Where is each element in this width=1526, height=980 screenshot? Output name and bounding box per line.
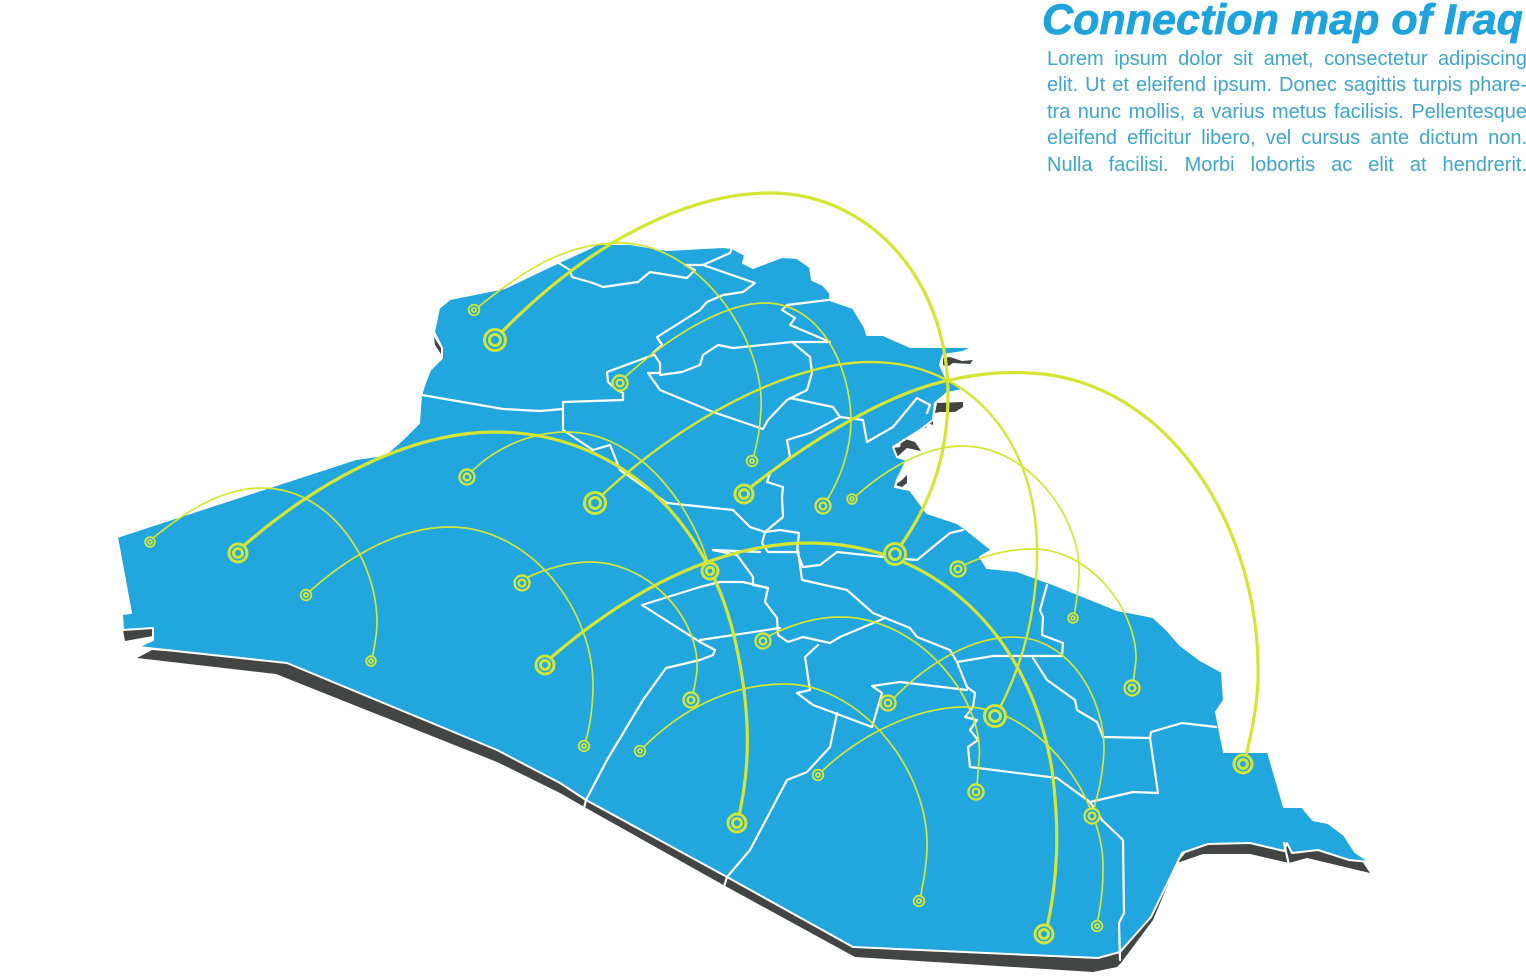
country land shape: [117, 244, 1370, 958]
thick arc: west to south: [240, 432, 747, 820]
description paragraph: elit. Ut et eleifend ipsum. Donec sagittis turpis phare-: [1047, 74, 1526, 96]
thick arc: centre to far south: [547, 543, 1057, 932]
connection node markers: [145, 305, 1252, 943]
thick arc: centre to far east: [746, 373, 1258, 760]
district borders: [422, 248, 1289, 960]
thick arc: north-west to south-east coast: [497, 193, 948, 553]
medium nodes: [460, 376, 1140, 824]
description paragraph: Lorem ipsum dolor sit amet, consectetur adipiscing: [1047, 48, 1526, 70]
thin arcs: [153, 243, 1136, 924]
medium arc: centre to south-east: [597, 362, 1037, 713]
description paragraph: eleifend efficitur libero, vel cursus ante dictum non.: [1047, 127, 1526, 149]
connection arcs: [153, 193, 1258, 932]
description paragraph: [1047, 48, 1526, 176]
large nodes: [229, 330, 1252, 943]
description paragraph: tra nunc mollis, a varius metus facilisis. Pellentesque: [1047, 101, 1526, 123]
description paragraph: Nulla facilisi. Morbi lobortis ac elit at hendrerit.: [1047, 154, 1526, 176]
small nodes: [145, 305, 1102, 931]
map extrusion shadow: [123, 337, 1370, 972]
